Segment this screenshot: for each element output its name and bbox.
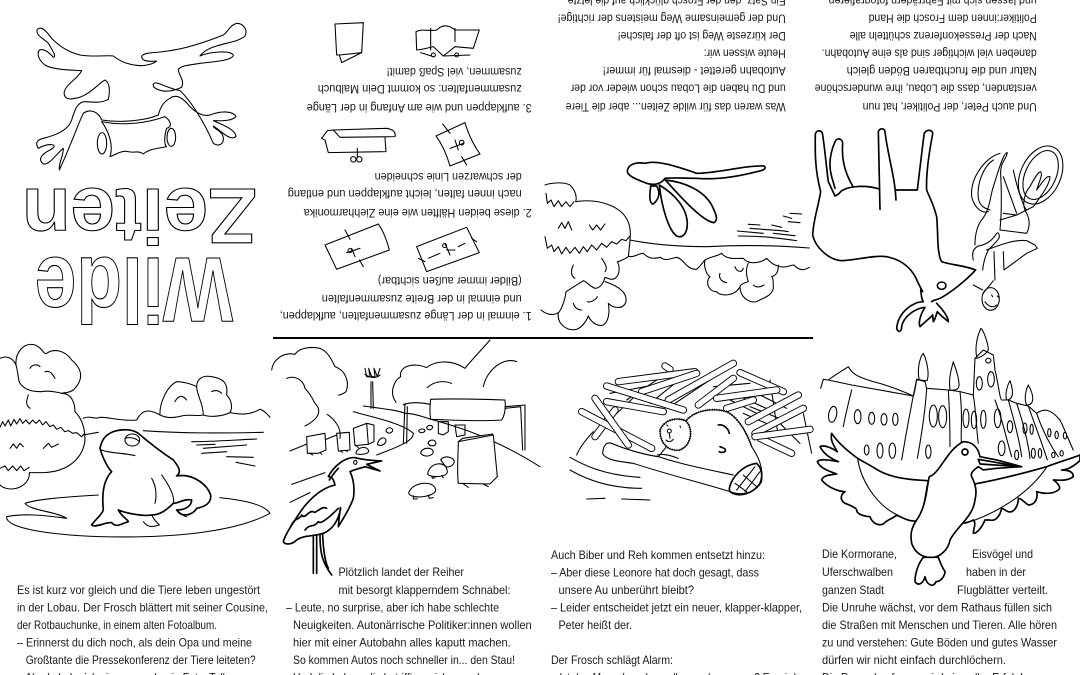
text block: Was waren das (upside down) [558,0,786,114]
text block: Kormorane and protest: dürfen wir nicht einfach durchlöchern. [822,653,1006,667]
text block: Und auch Peter (upside down): daneben viel wichtiger sind als eine Autobahn. [822,46,1037,60]
text block: Kormorane and protest: haben in der [966,565,1026,579]
text block: folding instructions (upside down): 2. diese beiden Hälften wie eine Ziehharmonika [303,206,532,220]
text block: folding instructions (upside down): nach innen falten, leicht aufklappen und entlang [288,187,522,201]
icon: upside-down title frog on log [37,23,246,170]
text block: Und auch Peter (upside down) [814,0,1037,114]
text block: folding instructions (upside down): zusammenfalten: so kommt Dein Malbuch [318,82,522,96]
text block: Was waren das (upside down): Der kürzeste Weg ist oft der falsche! [618,29,786,43]
text block: Was waren das (upside down): Autobahn gerettet - diesmal für immer! [603,64,786,78]
text block: Kormorane and protest: Eisvögel und [972,547,1033,561]
text block: Biber und Reh: Der Frosch schlägt Alarm: [551,653,673,667]
text block: opening story: Es ist kurz vor gleich und die Tiere leben ungestört [17,583,261,597]
text block: Biber und Reh [551,548,802,675]
text block: heron warning [286,565,532,675]
text block: Kormorane and protest: Die Kormorane, [822,547,897,561]
text block: folding instructions (upside down): zusammen, viel Spaß damit! [387,65,522,79]
icon: fire-bellied toad on lily pad [0,344,270,537]
text block: Kormorane and protest: die Straßen mit Menschen und Tieren. Alle hören [822,618,1057,632]
text block: folding instructions (upside down) [280,65,532,323]
text block: Biber und Reh: – Leider entscheidet jetzt ein neuer, klapper-klapper, [551,600,802,614]
text block: Kormorane and protest: Flugblätter verteilt. [957,583,1048,597]
text block: opening story: der Rotbauchunke, in einem alten Fotoalbum. [17,618,217,632]
text block: folding instructions (upside down): (Bilder immer außen sichtbar) [378,274,522,288]
text block: heron warning: So kommen Autos noch schneller in... den Stau! [293,653,515,667]
text block: Kormorane and protest: Die Unruhe wächst, vor dem Rathaus füllen sich [822,600,1052,614]
icon: dragonfly over landscape (upside down) [541,162,809,330]
text block: Und auch Peter (upside down): Und auch Peter, der Politiker, hat nun [863,100,1037,114]
text block: folding instructions (upside down): und einmal in der Breite zusammenfalten [322,292,522,306]
text block: Kormorane and protest [822,547,1057,675]
icon: kingfisher in flight [817,433,1080,585]
text block: Und auch Peter (upside down): verstanden, dass die Lobau, ihre wunderschöne [814,82,1037,96]
text block: Kormorane and protest: zu und verstehen: Gute Böden und gutes Wasser [822,636,1057,650]
text block: heron warning: Neuigkeiten. Autonärrische Politiker:innen wollen [293,618,532,632]
icon: town hall (Rathaus) [821,328,1073,460]
text block: Und auch Peter (upside down): Politiker:innen dem Frosch die Hand [869,12,1037,26]
text block: Biber und Reh: Peter heißt der. [558,618,632,632]
text block: opening story: Großtante die Pressekonferenz der Tiere leiteten? [26,653,256,667]
text block: Biber und Reh: unsere Au unberührt bleibt? [558,583,694,597]
text block: folding instructions (upside down): 3. aufklappen und wie am Anfang in der Länge [306,101,532,115]
text block: Was waren das (upside down): und Du haben die Lobau schon wieder vor der [571,82,786,96]
icon: deer (upside down) [813,129,1072,331]
heading: Zeiten (upside down): Zeiten [22,172,257,260]
text block: heron warning: mit besorgt klapperndem Schnabel: [338,583,510,597]
text block: Was waren das (upside down): Und der gemeinsame Weg meistens der richtige! [558,12,786,26]
text block: Was waren das (upside down): Was waren das für wilde Zeiten... aber die Tiere [565,100,786,114]
text block: heron warning: Plötzlich landet der Reiher [338,565,464,579]
text block: Biber und Reh: Auch Biber und Reh kommen entsetzt hinzu: [551,548,765,562]
text block: Und auch Peter (upside down): Natur und die fruchtbaren Böden gleich [847,64,1037,78]
text block: Und auch Peter (upside down): Nach der Pressekonferenz schütteln alle [849,29,1037,43]
icon: folding step sketches [322,23,480,272]
icon: motorway traffic jam scene [272,340,540,575]
text block: folding instructions (upside down): 1. einmal in der Länge zusammenfalten, aufklappen, [280,309,532,323]
divider line [273,337,813,339]
icon: beaver on lodge of sticks [570,363,812,500]
text block: Biber und Reh: – Aber diese Leonore hat doch gesagt, dass [551,566,759,580]
text block: folding instructions (upside down): der schwarzen Linie schneiden [375,170,522,184]
text block: opening story [17,583,268,675]
text block: opening story: in der Lobau. Der Frosch blättert mit seiner Cousine, [17,600,268,614]
text block: Was waren das (upside down): Heute wissen wir: [704,46,786,60]
text block: Kormorane and protest: Uferschwalben [822,565,893,579]
text block: Kormorane and protest: ganzen Stadt [822,583,885,597]
text block: heron warning: – Leute, no surprise, aber ich habe schlechte [286,600,499,614]
text block: opening story: – Erinnerst du dich noch, als dein Opa und meine [17,636,252,650]
text block: heron warning: hier mit einer Autobahn alles kaputt machen. [293,636,511,650]
